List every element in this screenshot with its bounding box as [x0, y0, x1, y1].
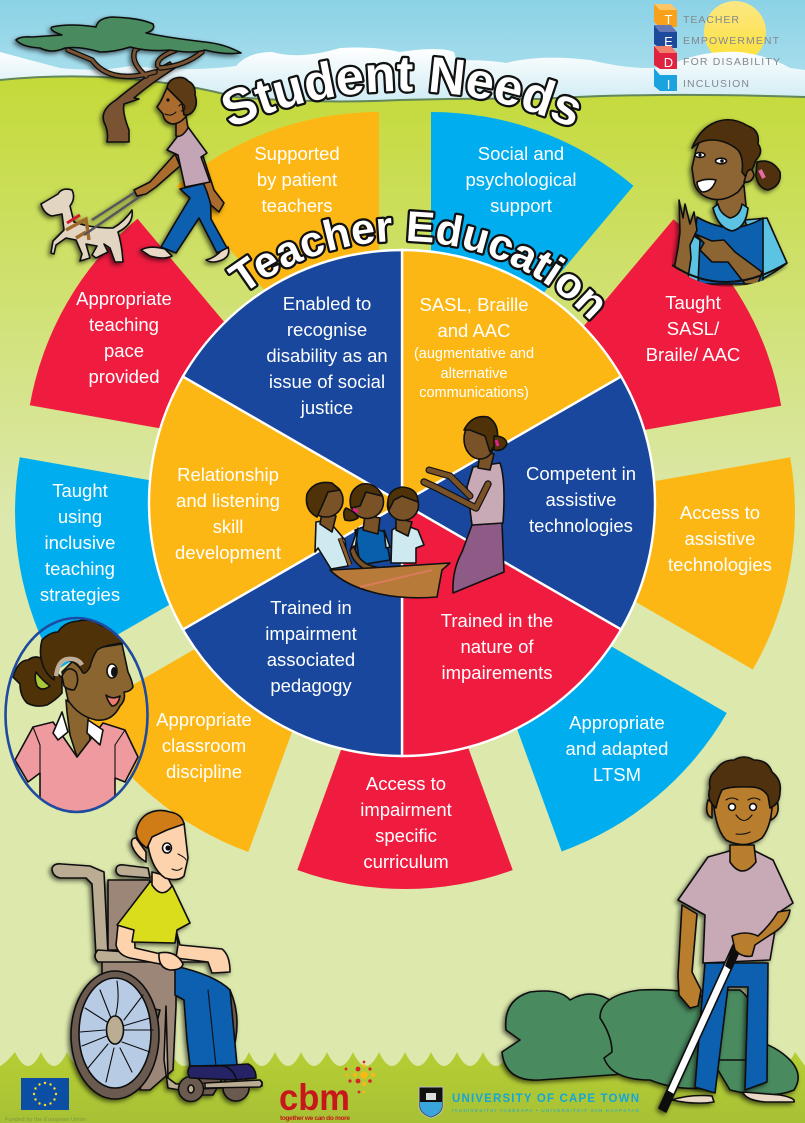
- logo: University of Cape Town: UNIVERSITY OF CAPE TOWN: [452, 1093, 639, 1105]
- cane: [659, 945, 740, 1112]
- logo: University of Cape Town: IYUNIVESITHI YASEKAPA • UNIVERSITEIT VAN KAAPSTAD: [452, 1108, 640, 1113]
- panel: outer wedge, taught using inclusive teaching strategies: teaching: [45, 558, 115, 579]
- panel: enabled to recognise disability: [183, 250, 402, 503]
- logo: TEDI: INCLUSION: [683, 78, 749, 90]
- panel: outer wedge, access to assistive technologies: assistive: [685, 528, 755, 549]
- panel: enabled to recognise disability: recognise: [287, 319, 367, 340]
- illustration: boy with white cane: [659, 757, 794, 1112]
- logo: TEDI: EMPOWERMENT: [683, 35, 780, 47]
- panel: outer wedge, taught SASL: Braile/ AAC: [646, 344, 740, 365]
- panel: outer wedge, access to assistive technologies: [480, 457, 795, 670]
- panel: outer wedge, appropriate teaching pace: [30, 219, 340, 460]
- panel: enabled to recognise disability: justice: [300, 397, 353, 418]
- child three: [388, 487, 424, 563]
- shoes: [218, 1064, 256, 1080]
- logo: TEDI: D: [664, 55, 673, 70]
- panel: outer wedge, taught using inclusive teaching strategies: Taught: [52, 480, 108, 501]
- panel: outer wedge, supported by patient teachers: teachers: [262, 195, 332, 216]
- panel: outer wedge, social and psychological support: psychological: [465, 169, 577, 190]
- panel: enabled to recognise disability: issue of social: [269, 371, 385, 392]
- panel: outer wedge, access to impairment specific curriculum: specific: [375, 825, 437, 846]
- logo: TEDI: TEACHER: [683, 14, 739, 26]
- panel: outer wedge, appropriate teaching pace: provided: [89, 366, 159, 387]
- panel: enabled to recognise disability: disability as an: [266, 345, 388, 366]
- logo: TEDI: T: [665, 12, 673, 27]
- panel: outer wedge, supported by patient teachers: Supported: [254, 143, 340, 164]
- panel: outer wedge, access to assistive technologies: technologies: [668, 554, 772, 575]
- background: grass strip: [0, 1052, 805, 1123]
- panel: trained in impairment associated pedagogy: Trained in: [270, 597, 352, 618]
- logo: TEDI: FOR DISABILITY: [683, 56, 780, 68]
- arms: [176, 930, 230, 973]
- logo: cbm: cbm: [279, 1077, 350, 1118]
- decorative arc under signing girl: [672, 263, 787, 282]
- panel: competent in assistive technologies: [402, 376, 655, 630]
- panel: outer wedge, appropriate classroom discipline: [83, 556, 356, 852]
- panel: relationship and listening skill development: skill: [213, 516, 243, 537]
- logo: TEDI: [654, 4, 780, 92]
- background: sky: [0, 0, 805, 110]
- panel: SASL, Braille and AAC: SASL, Braille: [420, 294, 528, 315]
- panel: outer wedge, social and psychological support: [431, 112, 634, 427]
- decorative horizon line: [0, 76, 805, 101]
- panel: competent in assistive technologies: technologies: [529, 515, 633, 536]
- illustration: girl signing: [674, 120, 787, 284]
- panel: trained in the nature of impairements: Trained in the: [441, 610, 553, 631]
- panel: inner circle, teacher education: [148, 249, 656, 757]
- illustration: man walking with guide dog: [41, 77, 229, 262]
- illustration: girl with hearing aid in oval: [6, 618, 148, 815]
- logo: TEDI: E: [664, 34, 673, 49]
- child one: [306, 482, 350, 569]
- logo: University of Cape Town: [419, 1087, 640, 1118]
- icon: guide dog: [41, 189, 142, 262]
- panel: competent in assistive technologies: assistive: [546, 489, 616, 510]
- panel: outer wedge, access to assistive technologies: Access to: [680, 502, 760, 523]
- panel: competent in assistive technologies: Competent in: [526, 463, 636, 484]
- panel: outer wedge, appropriate teaching pace: pace: [104, 340, 144, 361]
- panel: outer wedge, appropriate and adapted LTSM: [454, 556, 727, 852]
- illustration: acacia tree: [16, 17, 241, 142]
- panel: outer wedge, appropriate teaching pace: teaching: [89, 314, 159, 335]
- illustration: boy in wheelchair: [52, 810, 262, 1102]
- panel: trained in the nature of impairements: [402, 503, 621, 756]
- panel: trained in the nature of impairements: impairements: [441, 662, 553, 683]
- illustration: three children at a desk: [306, 482, 450, 598]
- panel: outer wedge, taught SASL: [471, 219, 781, 460]
- panel: outer wedge, appropriate and adapted LTSM: Appropriate: [569, 712, 665, 733]
- panel: SASL, Braille and AAC: [402, 250, 621, 503]
- panel: SASL, Braille and AAC: alternative: [441, 366, 507, 382]
- background: clouds: [0, 48, 805, 110]
- illustration: bush: [502, 990, 798, 1095]
- panel: outer wedge, appropriate and adapted LTSM: and adapted: [566, 738, 668, 759]
- panel: SASL, Braille and AAC: and AAC: [437, 320, 511, 341]
- panel: enabled to recognise disability: Enabled to: [283, 293, 371, 314]
- castor wheels: [223, 1075, 249, 1101]
- panel: outer wedge, appropriate classroom discipline: discipline: [166, 761, 242, 782]
- panel: outer wedge, access to impairment specific curriculum: Access to: [366, 773, 446, 794]
- neck and head: [152, 872, 172, 893]
- child two: [344, 484, 396, 576]
- panel: relationship and listening skill development: development: [175, 542, 281, 563]
- title: Student Needs: Student Needs: [220, 54, 582, 128]
- illustration: teacher: [424, 417, 507, 593]
- panel: trained in impairment associated pedagogy: impairment: [265, 623, 357, 644]
- rear wheel: [186, 990, 237, 1095]
- panel: SASL, Braille and AAC: (augmentative and: [414, 346, 534, 362]
- panel: outer wedge, appropriate teaching pace: Appropriate: [76, 288, 172, 309]
- panel: outer wedge, access to impairment specific curriculum: [297, 574, 513, 889]
- panel: outer wedge, taught using inclusive teaching strategies: using: [58, 506, 102, 527]
- panel: outer wedge, taught SASL: Taught: [665, 292, 721, 313]
- panel: trained in impairment associated pedagogy: pedagogy: [270, 675, 352, 696]
- shirt: [117, 882, 190, 943]
- panel: outer wedge, appropriate classroom discipline: classroom: [162, 735, 246, 756]
- panel: outer wedge, taught using inclusive teaching strategies: inclusive: [45, 532, 115, 553]
- panel: outer wedge, supported by patient teachers: by patient: [257, 169, 337, 190]
- logo: TEDI: I: [667, 77, 670, 92]
- panel: trained in the nature of impairements: nature of: [460, 636, 534, 657]
- panel: outer wedge, access to impairment specific curriculum: curriculum: [363, 851, 449, 872]
- panel: SASL, Braille and AAC: communications): [419, 385, 529, 401]
- desk: [330, 563, 450, 598]
- panel: outer wedge, supported by patient teachers: [176, 112, 379, 427]
- panel: outer wedge, access to impairment specific curriculum: impairment: [360, 799, 452, 820]
- logo: EU flag: Funded by the European Union: [5, 1117, 86, 1123]
- panel: outer wedge, taught using inclusive teaching strategies: strategies: [40, 584, 120, 605]
- title: Teacher Education: Teacher Education: [224, 209, 605, 322]
- icon: sun: [704, 1, 766, 63]
- panel: relationship and listening skill development: [149, 376, 402, 630]
- logo: cbm: together we can do more: [280, 1115, 350, 1122]
- panel: outer wedge, taught SASL: SASL/: [667, 318, 720, 339]
- panel: outer wedge, appropriate classroom discipline: Appropriate: [156, 709, 252, 730]
- logo: EU flag: [5, 1078, 86, 1123]
- panel: outer wedge, social and psychological support: support: [490, 195, 552, 216]
- armrest: [95, 950, 215, 962]
- panel: outer wedge, taught using inclusive teaching strategies: [15, 457, 330, 670]
- panel: relationship and listening skill development: and listening: [176, 490, 280, 511]
- panel: outer wedge, appropriate and adapted LTSM: LTSM: [593, 764, 641, 785]
- panel: trained in impairment associated pedagogy: associated: [267, 649, 355, 670]
- panel: trained in impairment associated pedagogy: [183, 503, 402, 756]
- panel: relationship and listening skill development: Relationship: [177, 464, 279, 485]
- logo: cbm: [279, 1061, 375, 1122]
- jeans: [175, 966, 237, 1066]
- panel: outer wedge, social and psychological support: Social and: [478, 143, 564, 164]
